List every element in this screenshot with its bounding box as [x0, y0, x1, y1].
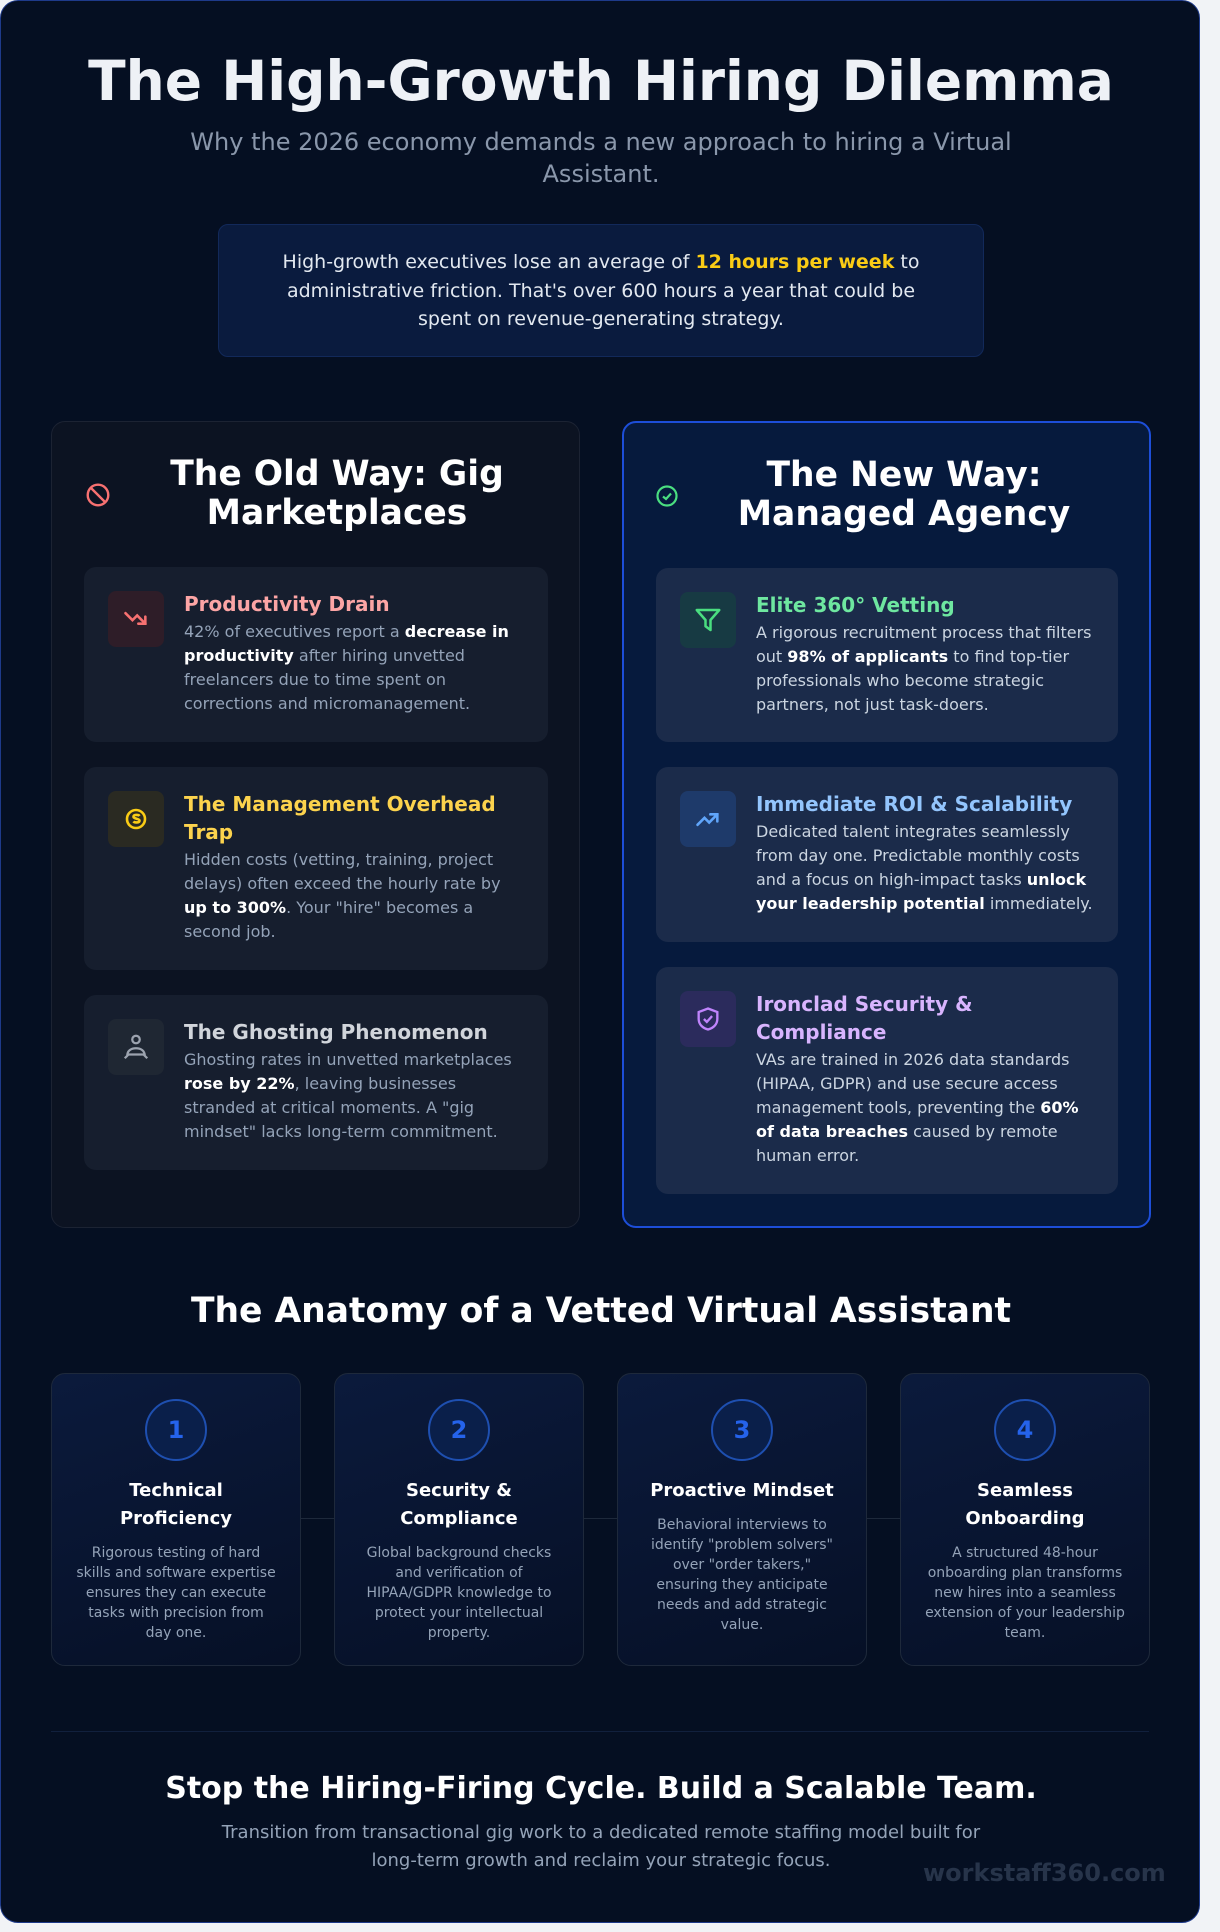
card: ghosting: Ghosting rates in unvetted marketplaces rose by 22%, leaving businesses stranded at critical moments. A "gig mindset" lacks long-term commitment.	[184, 1050, 512, 1141]
title: The High-Growth Hiring Dilemma	[88, 49, 1114, 113]
step 2: 2	[451, 1416, 467, 1444]
card: ROI: Immediate ROI & Scalability	[756, 792, 1072, 816]
card: ROI	[656, 767, 1118, 942]
footer text: Transition from transactional gig work to a dedicated remote staffing model built for long-term growth and reclaim your strategic focus.	[222, 1822, 980, 1871]
heading: new way: The New Way: Managed Agency	[738, 455, 1070, 534]
step 3	[617, 1373, 867, 1666]
icon: dollar	[108, 791, 164, 847]
icon: trend up	[680, 791, 736, 847]
card: vetting: Elite 360° Vetting	[756, 593, 955, 617]
step 2: Security & Compliance	[400, 1480, 518, 1529]
icon: funnel	[680, 592, 736, 648]
card: productivity drain	[84, 567, 548, 742]
card: security: Ironclad Security & Compliance	[756, 992, 973, 1044]
icon: check circle	[656, 485, 678, 507]
footer heading: Stop the Hiring-Firing Cycle. Build a Scalable Team.	[165, 1771, 1037, 1806]
heading: old way: The Old Way: Gig Marketplaces	[170, 454, 504, 533]
step 2: Global background checks and verification of HIPAA/GDPR knowledge to protect your intellectual property.	[366, 1545, 552, 1641]
callout: stat: High-growth executives lose an average of 12 hours per week to administrative friction. That's over 600 hours a year that could be spent on revenue-generating strategy.	[283, 251, 919, 330]
card: productivity drain: Productivity Drain	[184, 592, 390, 616]
step 4: A structured 48-hour onboarding plan transforms new hires into a seamless extension of your leadership team.	[925, 1545, 1125, 1641]
step 1: Technical Proficiency	[120, 1480, 232, 1529]
step 3: Behavioral interviews to identify "problem solvers" over "order takers," ensuring they anticipate needs and add strategic value.	[651, 1517, 833, 1633]
card: management overhead: The Management Overhead Trap	[184, 792, 496, 844]
step 1: 1	[168, 1416, 184, 1444]
card: productivity drain: 42% of executives report a decrease in productivity after hiring unvetted freelancers due to time spent on corrections and micromanagement.	[184, 622, 509, 713]
card: security	[656, 967, 1118, 1194]
icon: person	[108, 1019, 164, 1075]
card: ghosting: The Ghosting Phenomenon	[184, 1020, 488, 1044]
subtitle: Why the 2026 economy demands a new approach to hiring a Virtual Assistant.	[190, 128, 1012, 188]
step 1: Rigorous testing of hard skills and software expertise ensures they can execute tasks with precision from day one.	[76, 1545, 276, 1641]
step 3: 3	[734, 1416, 750, 1444]
card: ROI: Dedicated talent integrates seamlessly from day one. Predictable monthly costs and a focus on high-impact tasks unlock your leadership potential immediately.	[756, 822, 1093, 913]
panel: old way	[51, 421, 580, 1228]
callout: stat	[218, 224, 984, 357]
card: management overhead: Hidden costs (vetting, training, project delays) often exceed the hourly rate by up to 300%. Your "hire" becomes a second job.	[184, 850, 501, 941]
card: vetting: A rigorous recruitment process that filters out 98% of applicants to find top-tier professionals who become strategic partners, not just task-doers.	[756, 623, 1092, 714]
card: security: VAs are trained in 2026 data standards (HIPAA, GDPR) and use secure access management tools, preventing the 60% of data breaches caused by remote human error.	[756, 1050, 1078, 1165]
heading: anatomy: The Anatomy of a Vetted Virtual Assistant	[191, 1291, 1011, 1331]
icon: prohibited	[86, 484, 110, 506]
step 4	[900, 1373, 1150, 1666]
step 4: 4	[1017, 1416, 1033, 1444]
step 1	[51, 1373, 301, 1666]
panel: new way	[622, 421, 1151, 1228]
watermark: workstaff360.com	[923, 1859, 1166, 1887]
step 2	[334, 1373, 584, 1666]
connector line	[61, 1518, 1141, 1519]
card: management overhead	[84, 767, 548, 970]
step 3: Proactive Mindset	[650, 1480, 834, 1501]
icon: trend down	[108, 591, 164, 647]
icon: shield	[680, 991, 736, 1047]
step 4: Seamless Onboarding	[965, 1480, 1085, 1529]
card: vetting	[656, 568, 1118, 742]
card: ghosting	[84, 995, 548, 1170]
